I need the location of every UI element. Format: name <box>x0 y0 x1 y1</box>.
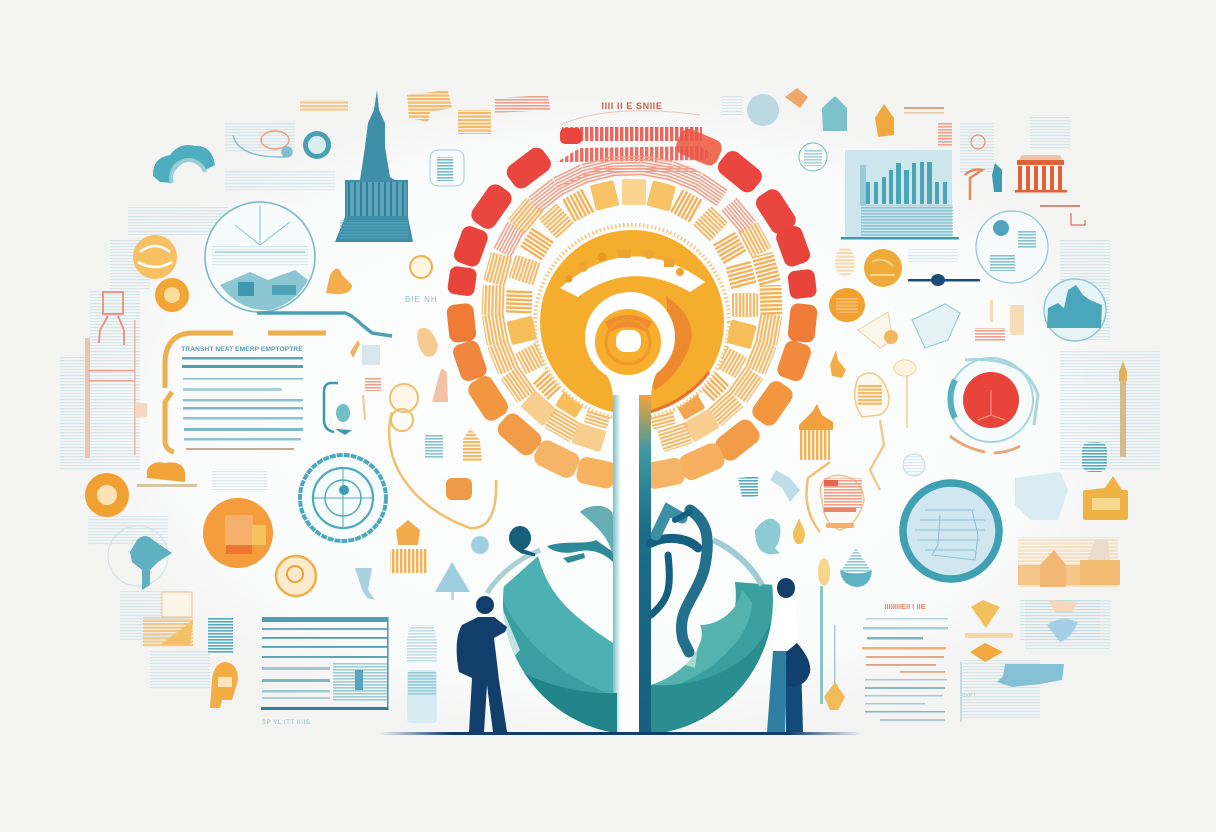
small bubble <box>471 536 489 554</box>
pale hatched text texture <box>60 115 1160 720</box>
icon: orange face <box>210 662 238 708</box>
circular diagram: teal landscape <box>220 270 308 310</box>
icon: orange figure <box>830 350 846 378</box>
text panel: bottom right <box>862 602 948 721</box>
globe: top arcs <box>487 550 540 593</box>
icon: gold medallion <box>410 256 432 278</box>
small pale text column: Iool I <box>962 693 975 699</box>
wheel title: IIII II E SNIIE <box>601 101 663 111</box>
document panel: left <box>165 333 326 452</box>
data panel: bottom left <box>261 617 389 710</box>
icon: teal bird <box>770 470 800 502</box>
head sketch with text <box>855 373 889 417</box>
icon: figure and hook <box>965 163 1002 200</box>
icon: teal building <box>1082 442 1107 472</box>
icon: gold coin <box>276 556 316 596</box>
small blue chart <box>425 435 443 459</box>
orange and red fragments <box>350 340 381 420</box>
icon: orange hatched sketch <box>143 592 193 647</box>
icon: orange duck <box>326 268 352 294</box>
icon: teal figure in ring <box>108 526 172 590</box>
white lollipop stem head <box>585 292 675 735</box>
icon: big orange circle <box>203 498 273 568</box>
radial segmented wheel <box>446 111 818 490</box>
icon: orange circle 1 <box>133 235 177 279</box>
icon: red figure <box>99 292 124 345</box>
document: orange bracket <box>165 333 326 452</box>
hub: white crescent with icons <box>560 249 705 297</box>
icon: teal splash <box>738 476 758 498</box>
icon: yellow building <box>1083 476 1128 520</box>
head: left woman <box>509 526 535 555</box>
text panel: red title: IIIIIIIIEII I IIE <box>884 602 926 611</box>
left branch <box>547 506 613 563</box>
orange label text: BIE NH <box>405 295 438 304</box>
pale lollipop icons <box>990 300 1024 335</box>
top right: label lines <box>904 107 994 172</box>
pale blue silhouette <box>355 568 375 600</box>
icon: teal skyline in circle <box>1044 279 1106 341</box>
icon: folded sketch <box>858 312 898 348</box>
red mini chart <box>1071 213 1085 225</box>
globe <box>487 540 775 740</box>
bottom left: hut <box>137 462 197 487</box>
icon: yellow drop <box>793 518 805 544</box>
icon: big teal ring <box>903 483 999 579</box>
hub: inner orange core <box>595 309 661 375</box>
globe: right half <box>651 582 775 740</box>
pale lollipop <box>894 360 916 428</box>
icon: tower <box>335 90 413 242</box>
icon: bottle <box>407 625 437 723</box>
pale blue map <box>1015 472 1068 520</box>
icon: orange badge <box>85 473 129 517</box>
ground line <box>378 732 862 735</box>
person: right <box>767 578 810 732</box>
icon: orange circle 2 <box>155 278 189 312</box>
globe: left half <box>500 556 617 740</box>
icon: teal cloud <box>153 145 215 183</box>
left red column <box>85 320 147 458</box>
icon: orange loaf <box>829 288 865 322</box>
icon: wide orange building <box>1018 537 1120 587</box>
icon: teal gear circle <box>300 455 386 541</box>
red rule <box>1040 205 1080 207</box>
circle diagram: right <box>976 211 1048 283</box>
icon: small orange tower <box>799 404 833 460</box>
top center-left pictogram <box>430 150 464 186</box>
icon: long lollipop <box>818 558 830 704</box>
connector: dark slider <box>908 274 980 286</box>
pale blue blot <box>1020 600 1100 642</box>
icon: small hatched circle <box>903 454 925 476</box>
stem <box>613 395 651 735</box>
top right: circular pictogram <box>799 143 827 171</box>
icon: red temple <box>1015 155 1067 192</box>
bar chart panel <box>841 150 959 240</box>
small pale text column <box>960 662 975 722</box>
bracket: teal <box>324 383 352 435</box>
branch sketch <box>870 420 884 490</box>
icon: gold pendants <box>965 600 1013 662</box>
chart baseline <box>841 237 959 240</box>
person right: left leg <box>767 651 788 732</box>
document: heading: TRANSHT NEAT EMERP EMPTOPTRE <box>181 346 303 353</box>
icon: small globe <box>303 131 331 159</box>
ring: hatched outer cells <box>482 155 782 452</box>
chart bars <box>860 162 947 205</box>
footnote text: SP YL ITT IIIIS <box>262 720 310 726</box>
icon: orange crown <box>390 520 428 573</box>
icon: orange head <box>417 328 438 357</box>
icon: orange coin <box>864 249 902 287</box>
red hatched label <box>975 328 1005 342</box>
icon: hanging pendant <box>824 625 845 710</box>
document: lines <box>182 357 303 450</box>
orange sketch around head <box>806 462 830 532</box>
icon: red target <box>949 358 1038 453</box>
icon: lamp <box>435 562 470 600</box>
hatched sketch near chart <box>908 248 958 262</box>
icon: teal comma <box>755 519 780 554</box>
icon: teal drop <box>840 548 872 587</box>
icon: red head bubble <box>820 475 864 530</box>
small orange icons <box>432 369 482 500</box>
ring: outer red and orange segments <box>446 111 818 490</box>
icon: blue block <box>208 617 233 653</box>
person right: right leg <box>786 660 803 732</box>
tree branches <box>651 510 707 652</box>
icon: pencil <box>1119 361 1127 457</box>
icon: blue tub <box>997 664 1064 687</box>
icon: gold oval <box>835 247 855 277</box>
top center-left orange icons <box>407 90 550 134</box>
person: left <box>457 596 507 732</box>
icon: bowl sketch <box>233 131 292 157</box>
teal line sketch <box>912 304 960 348</box>
orange hub disc <box>535 225 729 419</box>
top right-center icons <box>722 88 894 137</box>
person right: bag <box>786 643 810 686</box>
orange header block <box>300 100 348 112</box>
hub: deep orange crescent <box>645 296 692 390</box>
connector: teal <box>257 313 392 336</box>
pale sketches above coin <box>212 470 267 490</box>
orange loop with magnifier <box>389 384 496 528</box>
ring: inner cells <box>506 179 758 430</box>
circular diagram: left <box>205 202 315 312</box>
